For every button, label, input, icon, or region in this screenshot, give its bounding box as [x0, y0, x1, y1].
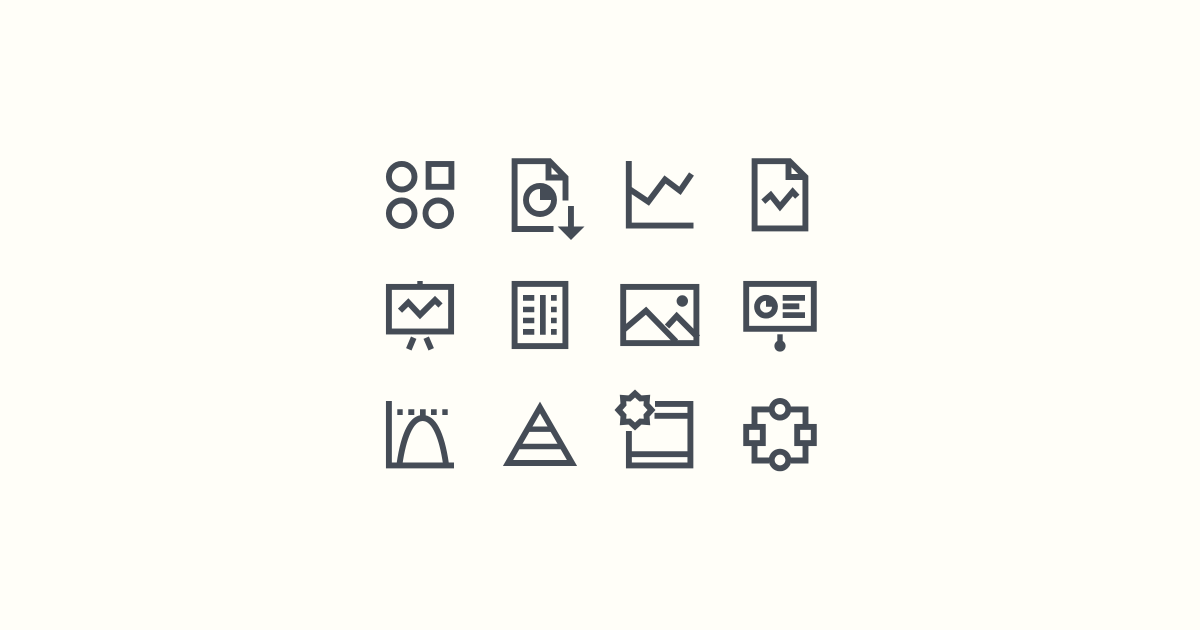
icon: line chart — [629, 161, 694, 226]
icon: landscape image — [623, 287, 698, 343]
icon: table document — [515, 284, 565, 346]
icon: presentation with pie chart and text — [746, 284, 814, 352]
icon: window with badge — [618, 394, 690, 465]
icon: document with pie chart and download arrow — [515, 161, 584, 240]
icon: circles and square — [389, 164, 451, 226]
icon: pyramid — [508, 408, 572, 463]
icon: presentation board with line chart — [389, 281, 451, 349]
icon: flow diagram with nodes — [746, 401, 814, 468]
icon: document with line chart — [755, 161, 805, 228]
icon: bell curve chart — [389, 401, 454, 465]
